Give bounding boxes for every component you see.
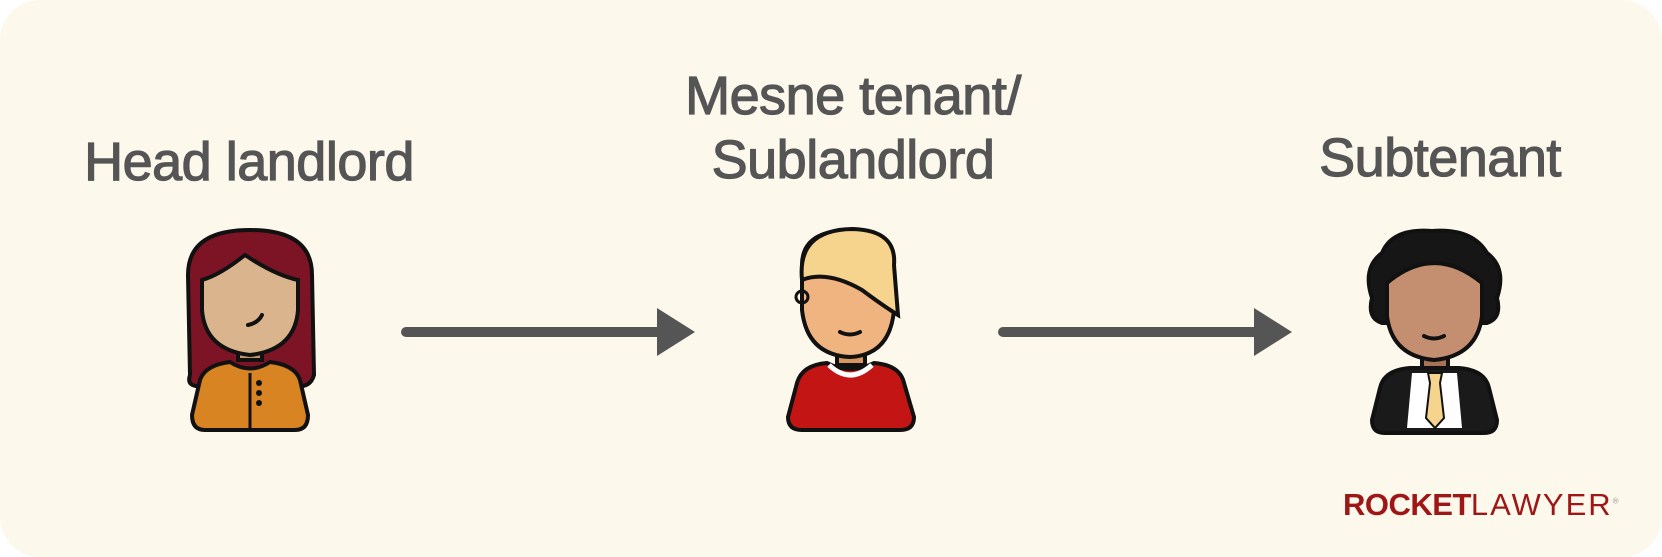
heading: head landlord: Head landlord [84, 132, 414, 192]
icon: sublandlord avatar [786, 227, 916, 432]
heading: mesne tenant / sublandlord: Sublandlord [712, 130, 994, 190]
logo: rocketlawyer: ROCKETLAWYER® [1343, 487, 1619, 522]
icon: subtenant avatar [1366, 228, 1502, 435]
arrow 2 [998, 308, 1292, 356]
heading: mesne tenant / sublandlord [685, 66, 1022, 190]
arrow 1 [401, 308, 695, 356]
icon: head landlord avatar [186, 228, 316, 432]
heading: subtenant: Subtenant [1319, 128, 1561, 188]
heading: mesne tenant / sublandlord: Mesne tenant/ [685, 66, 1021, 126]
